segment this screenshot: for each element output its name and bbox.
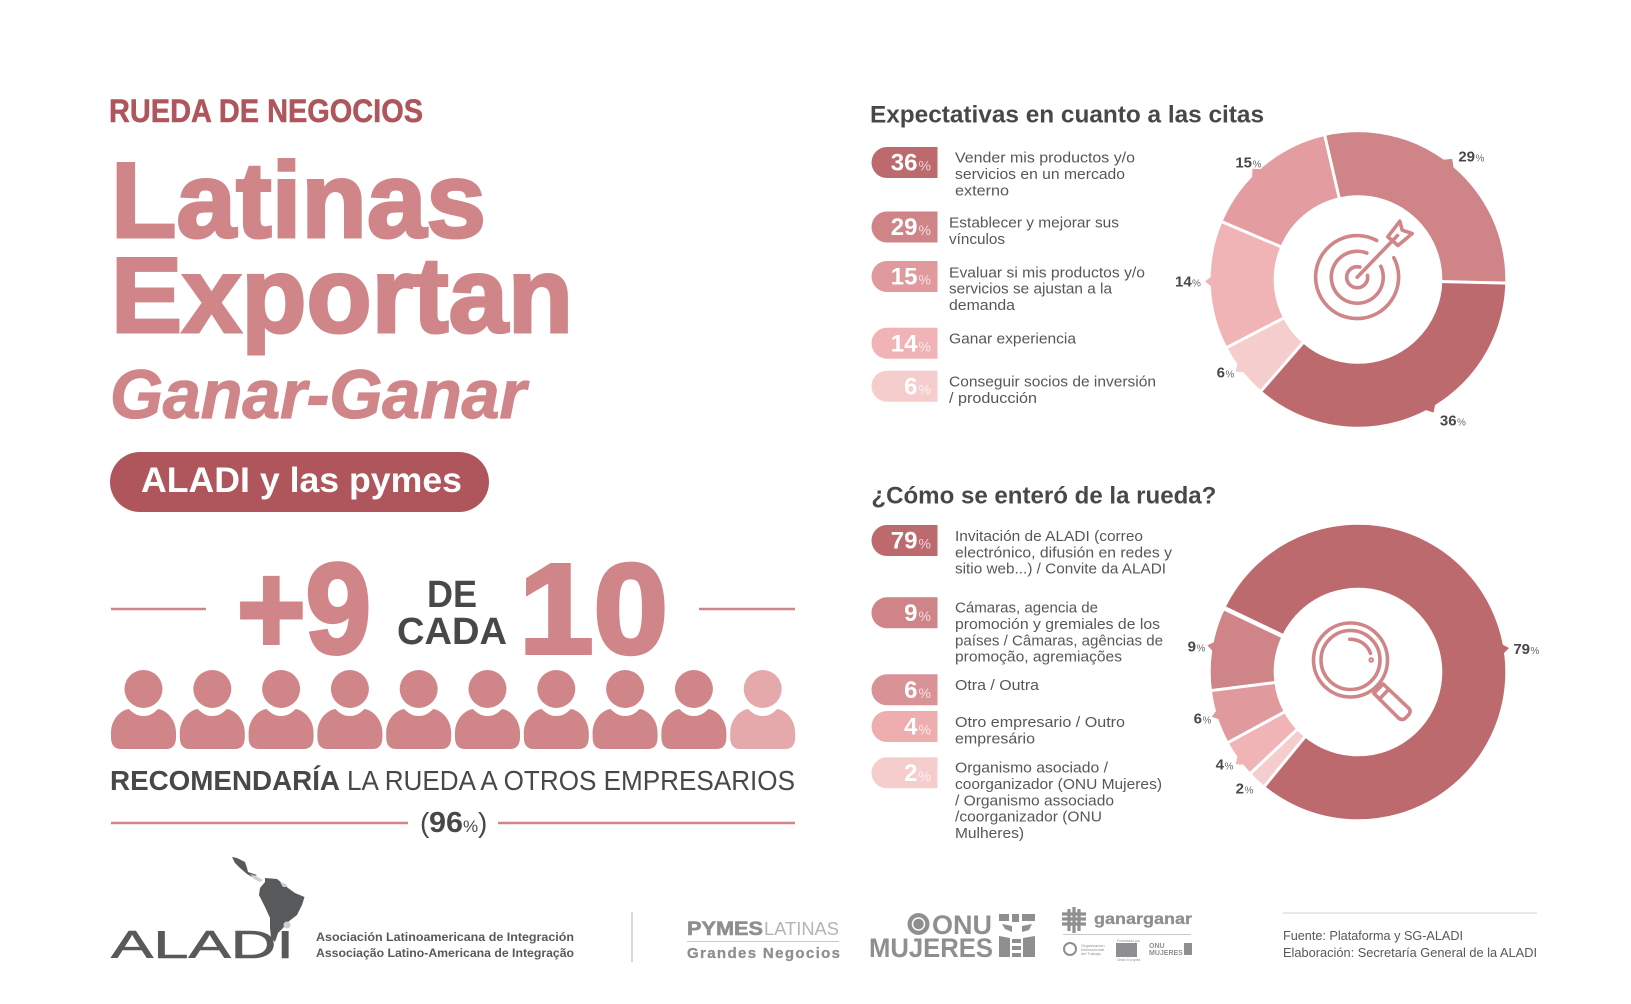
logo: ganarganar: Internacional bbox=[1081, 947, 1104, 952]
icon: Latin America map bbox=[232, 857, 304, 942]
caption: recomendaría la rueda bbox=[110, 765, 795, 796]
headline stat: +9 de cada 10 bbox=[111, 538, 795, 681]
legend row: 36 percent: 36 bbox=[891, 150, 918, 177]
pointers and value labels: expectativas: % bbox=[1476, 154, 1484, 165]
logo: ALADI with map: ALADI bbox=[111, 924, 294, 967]
heading: expectativas: Expectativas en cuanto a las citas bbox=[870, 102, 1264, 128]
panel: como se entero bbox=[871, 482, 1540, 842]
legend row: 14 percent: % bbox=[918, 338, 931, 354]
legend row: 36 percent: servicios en un mercado bbox=[955, 166, 1125, 183]
legend row: 2 percent: Mulheres) bbox=[955, 825, 1024, 842]
headline stat: +9 de cada 10: +9 bbox=[237, 538, 371, 681]
pointers and value labels: como se entero: 9 bbox=[1188, 639, 1196, 656]
pointers and value labels: expectativas bbox=[1175, 149, 1484, 430]
legend row: 15 percent bbox=[871, 261, 1145, 314]
logo: Pymes Latinas: LATINAS bbox=[764, 919, 839, 939]
legend row: 9 percent: promoção, agremiações bbox=[955, 649, 1122, 666]
legend row: 29 percent: 29 bbox=[891, 214, 918, 241]
legend row: 36 percent: % bbox=[918, 158, 931, 174]
legend row: 79 percent: % bbox=[918, 536, 931, 552]
donut chart: expectativas bbox=[1195, 116, 1521, 443]
legend row: 4 percent bbox=[871, 711, 1125, 747]
legend row: 14 percent: Ganar experiencia bbox=[949, 330, 1077, 347]
legend row: 6 percent: % bbox=[918, 685, 931, 701]
stat: 96%: ) bbox=[478, 807, 487, 838]
pictogram: ten people, nine highlighted bbox=[111, 670, 795, 749]
legend row: 79 percent bbox=[871, 525, 1173, 578]
legend row: 6 percent bbox=[871, 371, 1156, 407]
headline stat: +9 de cada 10: CADA bbox=[397, 611, 507, 653]
pointers and value labels: como se entero: % bbox=[1224, 761, 1234, 772]
title: Latinas Exportan: Latinas bbox=[111, 140, 486, 260]
legend row: 4 percent: 4 bbox=[904, 714, 918, 741]
pointers and value labels: expectativas: 29 bbox=[1458, 149, 1475, 166]
legend row: 29 percent: Establecer y mejorar sus bbox=[949, 215, 1119, 232]
legend row: 9 percent: países / Câmaras, agências de bbox=[955, 632, 1163, 649]
legend row: 9 percent: 9 bbox=[904, 600, 918, 627]
pointers and value labels: expectativas: 36 bbox=[1440, 413, 1457, 430]
pointers and value labels: expectativas: % bbox=[1192, 279, 1201, 290]
legend row: 2 percent: 2 bbox=[904, 760, 918, 787]
legend row: 6 percent: 6 bbox=[904, 373, 918, 400]
legend row: 36 percent bbox=[871, 147, 1135, 199]
logo: ganarganar: Organización bbox=[1081, 943, 1105, 948]
legend row: 2 percent bbox=[871, 757, 1162, 842]
donut chart: como se entero bbox=[1194, 508, 1522, 836]
logo: ONU Mujeres bbox=[869, 910, 1035, 963]
legend row: 4 percent: Otro empresario / Outro bbox=[955, 714, 1125, 731]
legend row: 14 percent bbox=[871, 328, 1077, 359]
legend row: 4 percent: % bbox=[918, 722, 931, 738]
credits: source: Elaboración: Secretaría General de la ALADI bbox=[1283, 945, 1537, 960]
panel: expectativas bbox=[870, 102, 1521, 443]
pointers and value labels: como se entero: 79 bbox=[1513, 641, 1530, 658]
logo: ganarganar: del Trabajo bbox=[1081, 951, 1102, 956]
pointers and value labels: expectativas: % bbox=[1226, 370, 1234, 381]
icon: magnifying glass bbox=[1314, 623, 1410, 720]
eyebrow: Rueda de Negocios: RUEDA DE NEGOCIOS bbox=[109, 93, 423, 129]
pointers and value labels: expectativas: % bbox=[1457, 418, 1466, 429]
legend row: 2 percent: coorganizador (ONU Mujeres) bbox=[955, 776, 1162, 793]
logo: ganarganar bbox=[1062, 907, 1192, 962]
pill: ALADI y las pymes: ALADI y las pymes bbox=[141, 461, 462, 500]
pointers and value labels: como se entero: % bbox=[1202, 715, 1212, 726]
legend row: 36 percent: Vender mis productos y/o bbox=[955, 150, 1135, 167]
caption: recomendaría la rueda: RECOMENDARÍA bbox=[110, 765, 340, 796]
legend row: 15 percent: 15 bbox=[891, 264, 918, 291]
logo: ALADI with map: Asociación Latinoamericana de Integración bbox=[316, 930, 574, 944]
pointers and value labels: expectativas: 6 bbox=[1217, 365, 1225, 382]
legend row: 36 percent: externo bbox=[955, 182, 1009, 199]
pointers and value labels: expectativas: 15 bbox=[1235, 154, 1252, 171]
icon: target with arrow bbox=[1316, 221, 1412, 319]
legend row: 79 percent: 79 bbox=[891, 528, 918, 555]
legend row: 15 percent: % bbox=[918, 272, 931, 288]
legend row: 29 percent: % bbox=[918, 222, 931, 238]
logo: ONU Mujeres: ONU bbox=[932, 910, 992, 940]
logo: ALADI with map: Associação Latino-Americana de Integração bbox=[316, 946, 574, 960]
subtitle: Ganar-Ganar: Ganar-Ganar bbox=[110, 356, 529, 433]
pointers and value labels: como se entero bbox=[1188, 639, 1540, 797]
credits: source bbox=[1283, 913, 1537, 960]
pill: ALADI y las pymes bbox=[110, 452, 489, 512]
pointers and value labels: como se entero: 2 bbox=[1236, 780, 1244, 797]
legend row: 15 percent: servicios se ajustan a la bbox=[949, 281, 1113, 298]
logo: ganarganar: Unión Europea bbox=[1117, 958, 1140, 962]
legend row: 6 percent: Conseguir socios de inversión bbox=[949, 374, 1156, 391]
legend row: 6 percent: 6 bbox=[904, 677, 918, 704]
pointers and value labels: expectativas: 14 bbox=[1175, 274, 1192, 291]
legend row: 9 percent: Cámaras, agencia de bbox=[955, 600, 1098, 617]
logo: Pymes Latinas bbox=[687, 919, 840, 962]
legend row: 2 percent: Organismo asociado / bbox=[955, 760, 1109, 777]
caption: recomendaría la rueda: LA RUEDA A OTROS EMPRESARIOS bbox=[347, 765, 795, 796]
legend row: 6 percent bbox=[871, 674, 1040, 705]
title: Latinas Exportan: Exportan bbox=[111, 235, 573, 355]
title: Latinas Exportan bbox=[111, 140, 573, 355]
legend row: 6 percent: Otra / Outra bbox=[955, 677, 1040, 694]
logo: ganarganar: ganarganar bbox=[1094, 911, 1192, 928]
logo: ganarganar: Financiado por bbox=[1117, 939, 1141, 943]
legend row: 15 percent: demanda bbox=[949, 297, 1016, 314]
pointers and value labels: como se entero: 6 bbox=[1194, 710, 1202, 727]
headline stat: +9 de cada 10: DE bbox=[427, 574, 477, 616]
pointers and value labels: como se entero: 4 bbox=[1216, 756, 1225, 773]
legend row: 9 percent: % bbox=[918, 608, 931, 624]
heading: como se entero: ¿Cómo se enteró de la rueda? bbox=[871, 482, 1216, 509]
legend row: 6 percent: % bbox=[918, 381, 931, 397]
legend row: 2 percent: / Organismo associado bbox=[955, 792, 1114, 809]
pointers and value labels: como se entero: % bbox=[1196, 644, 1206, 655]
legend row: 79 percent: Invitación de ALADI (correo bbox=[955, 528, 1143, 545]
logo: Pymes Latinas: PYMES bbox=[687, 919, 763, 940]
headline stat: +9 de cada 10: 10 bbox=[519, 538, 668, 681]
legend row: 15 percent: Evaluar si mis productos y/o bbox=[949, 264, 1145, 281]
logo: ALADI with map bbox=[111, 857, 574, 967]
legend row: 79 percent: sitio web...) / Convite da ALADI bbox=[955, 560, 1166, 578]
legend row: 29 percent: vínculos bbox=[949, 231, 1005, 248]
logo: ganarganar: ONU bbox=[1149, 943, 1165, 950]
legend row: 6 percent: / producción bbox=[949, 390, 1037, 407]
stat: 96%: ( bbox=[420, 807, 430, 838]
logo: Pymes Latinas: Grandes Negocios bbox=[687, 945, 840, 962]
legend row: 2 percent: % bbox=[918, 768, 931, 784]
legend row: 14 percent: 14 bbox=[891, 330, 918, 357]
legend row: 2 percent: /coorganizador (ONU bbox=[955, 809, 1102, 826]
stat: 96% bbox=[111, 807, 795, 839]
pointers and value labels: expectativas: % bbox=[1252, 159, 1262, 170]
legend row: 9 percent: promoción y gremiales de los bbox=[955, 616, 1160, 633]
credits: source: Fuente: Plataforma y SG-ALADI bbox=[1283, 928, 1463, 943]
logo: ganarganar: MUJERES bbox=[1149, 950, 1183, 957]
pointers and value labels: como se entero: % bbox=[1244, 785, 1254, 796]
stat: 96%: % bbox=[463, 817, 478, 836]
legend row: 29 percent bbox=[871, 212, 1119, 248]
pointers and value labels: como se entero: % bbox=[1530, 646, 1540, 657]
legend row: 79 percent: electrónico, difusión en redes y bbox=[955, 544, 1173, 561]
legend row: 4 percent: empresário bbox=[955, 730, 1035, 747]
logo: ONU Mujeres: MUJERES bbox=[869, 933, 993, 963]
legend row: 9 percent bbox=[871, 597, 1163, 666]
stat: 96%: 96 bbox=[429, 807, 463, 839]
